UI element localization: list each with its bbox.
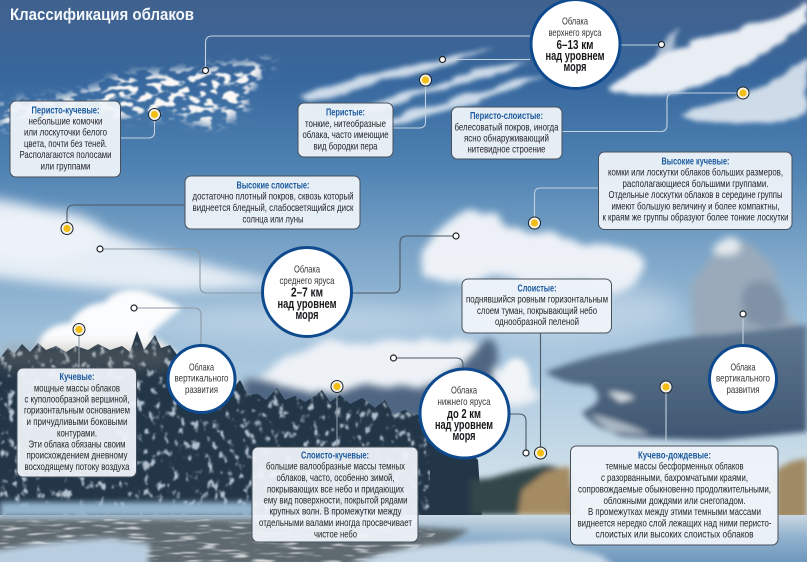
text: altocumulus	[602, 166, 789, 224]
clouds: cumulus left	[36, 290, 182, 378]
text: cirrocumulus: небольшие комочки	[28, 116, 103, 128]
text: cumulus: и причудливыми боковыми	[26, 416, 128, 428]
text: cirrocumulus: цвета, почти без теней.	[24, 138, 107, 150]
badge: lower tier clouds: Облака	[451, 384, 477, 396]
badge: lower tier clouds: нижнего яруса	[438, 396, 491, 408]
panel: cirrostratus	[452, 107, 562, 159]
text: cumulonimbus: обложными дождями или снегопадом.	[604, 495, 746, 507]
badge: vertical development right: Облака	[730, 362, 756, 374]
clouds: cirrus upper right	[608, 2, 807, 124]
text: stratocumulus: крупных волн. В промежутки между	[270, 506, 402, 518]
panel: cirrus	[298, 103, 393, 157]
panel: altocumulus	[598, 152, 792, 230]
clouds: cumulonimbus tower	[689, 241, 796, 350]
text: stratocumulus: ему вид поверхности, покрытой рядами	[264, 494, 408, 506]
text: stratus	[466, 294, 608, 328]
text: stratocumulus: большие валообразные массы темных	[266, 460, 406, 472]
forest: left trees	[0, 331, 482, 518]
ground: snowy river	[0, 502, 807, 562]
badge: middle tier clouds: над уровнем	[278, 296, 336, 311]
text: altostratus	[192, 190, 354, 226]
badge: middle tier clouds: 2–7 км	[291, 284, 323, 300]
panel: cumulus	[17, 368, 136, 477]
heading: altostratus: Высокие слоистые:	[236, 180, 310, 192]
text: stratocumulus	[259, 460, 412, 540]
badge: middle tier clouds: моря	[296, 307, 318, 322]
text: cumulonimbus: с разорванными, бахромчатыми краями,	[601, 472, 748, 484]
badge: upper tier clouds	[531, 0, 620, 88]
badge: vertical development right: развития	[726, 384, 760, 396]
text: stratocumulus: покрывающих все небо и придающих	[267, 484, 405, 496]
badge: vertical development left	[168, 346, 235, 412]
clouds: stratocumulus middle	[240, 335, 535, 425]
text: cirrus	[302, 118, 389, 152]
text: altostratus: солнца или луны	[242, 214, 304, 226]
text: cirrostratus: белесоватый покров, иногда	[454, 122, 559, 134]
badge: middle tier clouds: Облака	[294, 264, 320, 276]
clouds: cirrus streaks upper middle	[300, 48, 545, 135]
text: cirrocumulus: или группами	[40, 160, 91, 172]
badge: vertical development left: вертикального	[174, 372, 229, 384]
text: cirrocumulus	[20, 116, 112, 172]
badge: lower tier clouds	[420, 369, 509, 458]
text: stratus: однообразной пеленой	[495, 316, 579, 328]
badge: lower tier clouds: моря	[452, 428, 476, 443]
text: cumulonimbus	[578, 460, 772, 540]
heading: cirrocumulus: Перисто-кучевые:	[32, 104, 100, 116]
text: cumulus: горизонтальным основанием	[24, 404, 130, 416]
clouds: cumulonimbus body	[545, 325, 807, 440]
connector lines	[67, 36, 743, 453]
text: stratocumulus: облаков, часто, особенно зимой,	[276, 472, 394, 484]
text: stratus: слоем туман, покрывающий небо	[477, 305, 597, 317]
badge: upper tier clouds: моря	[564, 59, 586, 74]
panel: cirrocumulus	[10, 101, 120, 177]
text: cumulus: с куполообразной вершиной,	[24, 394, 130, 406]
text: cirrus: вид бородки пера	[314, 140, 378, 152]
text: cirrostratus: ясно обнаруживающий	[464, 132, 549, 144]
connector end dots	[97, 42, 746, 456]
text: cumulus: мощные массы облаков	[34, 382, 120, 394]
badge: upper tier clouds: 6–13 км	[556, 37, 594, 52]
panel: cumulonimbus	[570, 446, 778, 545]
text: cirrus: тонкие, нитеобразные	[305, 118, 386, 130]
badge: middle tier clouds	[262, 248, 352, 336]
text: cumulus: Эти облака обязаны своим	[28, 438, 126, 450]
text: altostratus: достаточно плотный покров, сквозь который	[192, 190, 354, 202]
text: cirrocumulus: Располагаются полосами	[20, 149, 112, 161]
text: cumulus: восходящему потоку воздуха	[24, 461, 130, 473]
badge: upper tier clouds: Облака	[562, 16, 588, 28]
badge: lower tier clouds: над уровнем	[435, 417, 493, 432]
title: Классификация облаков	[10, 6, 194, 24]
badge: vertical development right	[710, 346, 776, 412]
text: cumulonimbus: слоистых или высоких слоистых облаков	[596, 528, 754, 540]
yellow markers	[61, 74, 749, 459]
heading: cumulus: Кучевые:	[60, 371, 94, 383]
text: cumulus: происхождением дневному	[26, 450, 128, 462]
panel: stratus	[462, 279, 612, 333]
text: cumulonimbus: темные массы бесформенных облаков	[606, 460, 744, 472]
panel: stratocumulus	[252, 447, 418, 542]
badge: upper tier clouds: над уровнем	[546, 48, 604, 63]
text: altostratus: виднеется бледный, слабосветящийся диск	[192, 202, 354, 214]
text: stratus: поднявшийся ровным горизонтальным	[466, 294, 608, 306]
badge: lower tier clouds: до 2 км	[447, 406, 481, 421]
forest: right tree lines	[470, 458, 807, 520]
badge: middle tier clouds: среднего яруса	[280, 275, 335, 287]
text: stratocumulus: отдельными валами иногда просвечивает	[259, 517, 412, 529]
clouds: haze	[140, 280, 680, 340]
text: cirrostratus: нитевидное строение	[468, 144, 546, 156]
text: cirrostratus	[454, 122, 559, 156]
clouds: altocumulus middle	[420, 207, 642, 290]
badge: upper tier clouds: верхнего яруса	[548, 27, 602, 39]
heading: stratus: Слоистые:	[518, 282, 556, 294]
text: cirrus: облака, часто имеющие	[302, 129, 389, 141]
clouds: cirrocumulus patches	[0, 60, 275, 128]
badge: vertical development right: вертикального	[716, 372, 770, 384]
badge: vertical development left: развития	[185, 384, 218, 396]
clouds: white band left	[0, 196, 290, 292]
text: cumulus	[24, 382, 130, 473]
badge: vertical development left: Облака	[189, 362, 214, 374]
text: cumulus: контурами.	[57, 428, 97, 440]
heading: cumulonimbus: Кучево-дождевые:	[638, 450, 711, 462]
text: stratocumulus: чистое небо	[314, 528, 357, 540]
heading: altocumulus: Высокие кучевые:	[662, 156, 730, 168]
text: cirrocumulus: или лоскуточки белого	[24, 126, 107, 138]
heading: stratocumulus: Слоисто-кучевые:	[301, 450, 369, 462]
panel: altostratus	[185, 176, 360, 229]
heading: cirrus: Перистые:	[326, 106, 365, 118]
heading: cirrostratus: Перисто-слоистые:	[470, 110, 543, 122]
